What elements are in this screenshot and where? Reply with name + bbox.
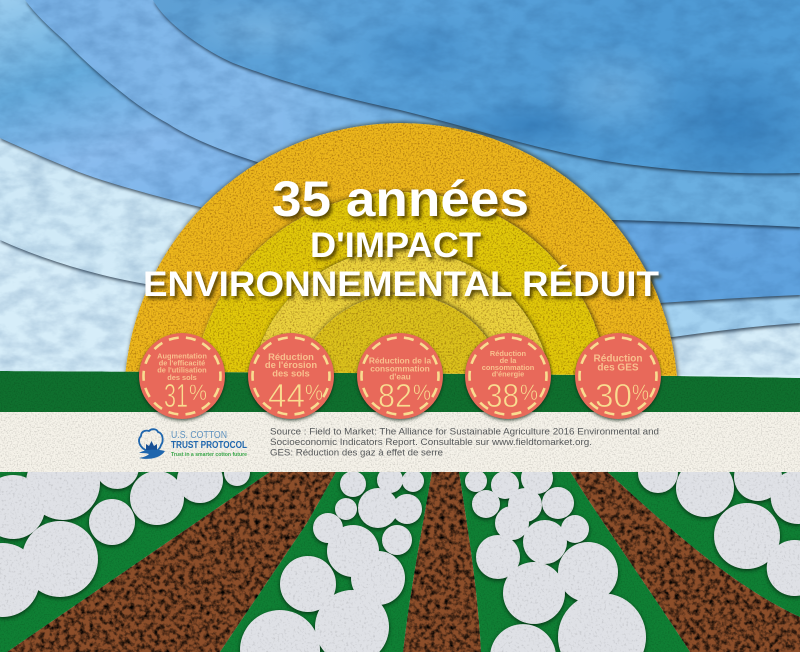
sky layer: upper blue band — [25, 0, 800, 250]
cotton bolls center-right group — [465, 462, 646, 652]
badge: water use 82%: 82 — [378, 377, 412, 414]
badge: greenhouse gases 30%: % — [632, 380, 649, 405]
sky: layered watercolor paper — [0, 0, 800, 400]
badge: water use 82%: consommation — [370, 364, 430, 374]
badge: soil use efficiency 31%: des sols — [167, 373, 197, 382]
title line: 35 années: 35 années — [272, 171, 529, 227]
badge: greenhouse gases 30%: des GES — [597, 362, 639, 374]
badge: soil use efficiency 31% — [139, 333, 225, 419]
badge: soil erosion 44%: Réduction — [268, 351, 314, 362]
badge: soil use efficiency 31%: Augmentation — [157, 352, 207, 360]
badge: soil erosion 44% — [248, 333, 334, 419]
badge: soil erosion 44%: % — [305, 380, 323, 405]
badge: greenhouse gases 30%: 30 — [595, 377, 632, 414]
badge: energy use 38%: consommation — [482, 363, 535, 372]
sky layer: top darkest blue band — [153, 0, 800, 173]
badge: soil use efficiency 31%: de l'utilisation — [157, 366, 207, 374]
green hill horizon band — [0, 371, 800, 414]
badge: soil use efficiency 31%: de l'efficacité — [159, 358, 205, 368]
source note: GES: Réduction des gaz à effet de serre — [270, 448, 443, 458]
field green base — [0, 465, 800, 652]
logo: U.S. Cotton Trust Protocol — [139, 429, 247, 459]
logo: U.S. Cotton Trust Protocol: TRUST PROTOCOL — [171, 440, 247, 451]
sun: concentric fabric semicircles — [124, 123, 678, 400]
logo tagline: Trust in a smarter cotton future — [171, 452, 247, 458]
sun third ring — [250, 249, 552, 400]
soil furrow right — [566, 465, 800, 652]
badge: energy use 38%: de la — [500, 356, 517, 365]
badge: soil use efficiency 31%: % — [189, 380, 207, 405]
title line: D'IMPACT: D'IMPACT — [310, 226, 481, 265]
cotton bolls center-left group — [240, 467, 424, 652]
sky layer: medium blue band — [0, 0, 800, 303]
badge: water use 82%: d'eau — [389, 372, 411, 382]
title — [143, 171, 659, 304]
source note: Source : Field to Market: The Alliance for Sustainable Agriculture 2016 Environmental and — [270, 426, 659, 438]
logo icon: cotton boll and hands — [139, 429, 165, 459]
badge: greenhouse gases 30% — [575, 333, 661, 419]
soil furrow left — [7, 465, 340, 652]
badge: soil erosion 44%: 44 — [268, 377, 305, 414]
source note: Socioeconomic Indicators Report. Consultable sur www.fieldtomarket.org. — [270, 437, 592, 448]
badge: greenhouse gases 30%: Réduction — [594, 354, 642, 364]
badge: water use 82%: Réduction de la — [369, 356, 432, 366]
sun inner ring — [295, 294, 507, 400]
badge: energy use 38%: 38 — [486, 377, 519, 414]
badge: energy use 38%: % — [520, 380, 538, 405]
sun outer ring — [124, 123, 678, 400]
soil furrow center — [403, 465, 481, 652]
badge: soil use efficiency 31%: 31 — [164, 377, 188, 414]
badge: soil erosion 44%: de l'érosion — [265, 359, 317, 370]
badge: water use 82% — [357, 333, 443, 419]
sky watercolor blotches — [212, 12, 796, 172]
sun second ring — [193, 192, 609, 400]
badge: soil erosion 44%: des sols — [272, 368, 310, 378]
canvas footer band — [0, 412, 800, 472]
sky paper grain — [0, 0, 800, 375]
cotton bolls far-right group — [638, 453, 800, 596]
sky layer: light band — [0, 0, 800, 337]
title line: ENVIRONNEMENTAL RÉDUIT: ENVIRONNEMENTAL RÉDUIT — [143, 264, 659, 304]
badge: energy use 38%: d'énergie — [492, 370, 524, 378]
source note — [270, 426, 659, 458]
cotton bolls left group — [0, 445, 250, 617]
badge: energy use 38%: Réduction — [490, 349, 527, 358]
badge: water use 82%: % — [413, 380, 431, 405]
cotton field: furrows, plants and bolls — [0, 445, 800, 652]
logo wordmark: U.S. COTTON — [171, 430, 227, 441]
badge: energy use 38% — [465, 333, 551, 419]
